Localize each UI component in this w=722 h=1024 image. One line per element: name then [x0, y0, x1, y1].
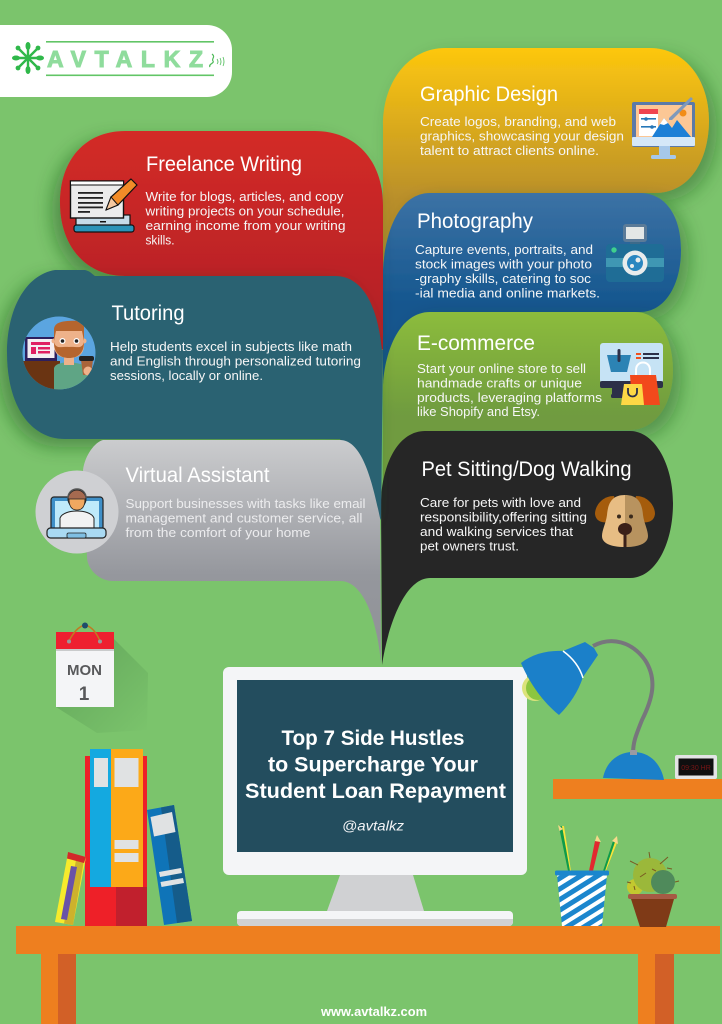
panel: e-commerce: handmade crafts or unique — [417, 376, 582, 390]
title: Top 7 Side Hustles — [282, 727, 464, 750]
website footer: www.avtalkz.com — [320, 1004, 427, 1019]
monitor with title — [223, 667, 527, 926]
digital clock — [675, 755, 717, 779]
panel: e-commerce: E-commerce — [417, 332, 535, 355]
panel: pet sitting and dog walking: and walking services that — [420, 525, 574, 539]
panel: graphic design — [383, 48, 709, 300]
icon: camera — [606, 224, 664, 282]
panel: tutoring — [7, 270, 383, 520]
cactus — [627, 852, 679, 927]
panel: freelance writing — [60, 131, 383, 350]
panel: virtual assistant — [36, 440, 381, 665]
panel: photography: stock images with your photo — [415, 258, 592, 272]
panel: photography: Capture events, portraits, and — [415, 243, 593, 257]
panel: graphic design: graphics, showcasing your design — [420, 130, 624, 144]
panel: freelance writing: writing projects on your schedule, — [144, 204, 344, 218]
icon: dog — [595, 495, 655, 547]
icon: laptop with pencil — [70, 179, 137, 232]
icon: headset assistant — [36, 470, 118, 554]
panel: freelance writing: earning income from your writing — [146, 219, 346, 233]
panel: freelance writing: skills. — [146, 234, 174, 248]
calendar — [56, 622, 148, 733]
title: Student Loan Repayment — [245, 780, 506, 803]
pencil cup — [555, 825, 618, 926]
panel: freelance writing: Write for blogs, articles, and copy — [146, 190, 344, 204]
panel: virtual assistant: management and customer service, all — [126, 512, 362, 526]
panel: pet sitting and dog walking: Care for pets with love and — [420, 496, 581, 510]
title — [245, 727, 506, 803]
books — [55, 749, 192, 926]
panel: graphic design: talent to attract clients online. — [420, 144, 599, 158]
panel: virtual assistant: Virtual Assistant — [126, 464, 270, 487]
panel: virtual assistant: from the comfort of your home — [126, 526, 311, 540]
panel: photography — [383, 193, 681, 400]
panel: photography: -graphy skills, catering to soc — [415, 272, 591, 286]
title: to Supercharge Your — [268, 754, 478, 776]
panel: e-commerce: products, leveraging platforms — [417, 391, 602, 405]
logo — [0, 25, 232, 97]
panel: photography: Photography — [417, 210, 533, 233]
shelf — [553, 779, 722, 799]
lamp — [521, 641, 664, 780]
panel: photography: -ial media and online markets. — [415, 286, 600, 300]
panel: pet sitting and dog walking: pet owners trust. — [420, 540, 519, 554]
calendar: MON — [67, 662, 102, 679]
panel: tutoring: Help students excel in subjects like math — [110, 340, 352, 354]
panel: e-commerce — [383, 312, 673, 520]
panel: pet sitting and dog walking: responsibility,offering sitting — [420, 510, 587, 524]
desk — [16, 926, 720, 1024]
digital clock: 09:30 HR — [681, 765, 711, 772]
panel: freelance writing: Freelance Writing — [146, 153, 302, 176]
panel: e-commerce: like Shopify and Etsy. — [417, 405, 540, 419]
panel: pet sitting and dog walking — [381, 431, 673, 665]
icon: tutor portrait — [20, 316, 96, 392]
calendar: 1 — [79, 684, 90, 705]
panel: tutoring: and English through personalized tutoring — [110, 354, 361, 368]
icon: design monitor — [632, 97, 695, 159]
panel: e-commerce: Start your online store to sell — [417, 362, 586, 376]
logo: AVTALKZ — [47, 46, 203, 72]
panel: graphic design: Create logos, branding, and web — [420, 115, 616, 129]
panel: virtual assistant: Support businesses with tasks like email — [126, 497, 366, 511]
panel: tutoring: Tutoring — [112, 302, 184, 325]
icon: online shop — [600, 343, 663, 405]
panel: tutoring: sessions, locally or online. — [110, 369, 263, 383]
handle: @avtalkz — [342, 818, 404, 834]
panel: graphic design: Graphic Design — [420, 83, 558, 106]
panel: pet sitting and dog walking: Pet Sitting/Dog Walking — [422, 458, 632, 481]
